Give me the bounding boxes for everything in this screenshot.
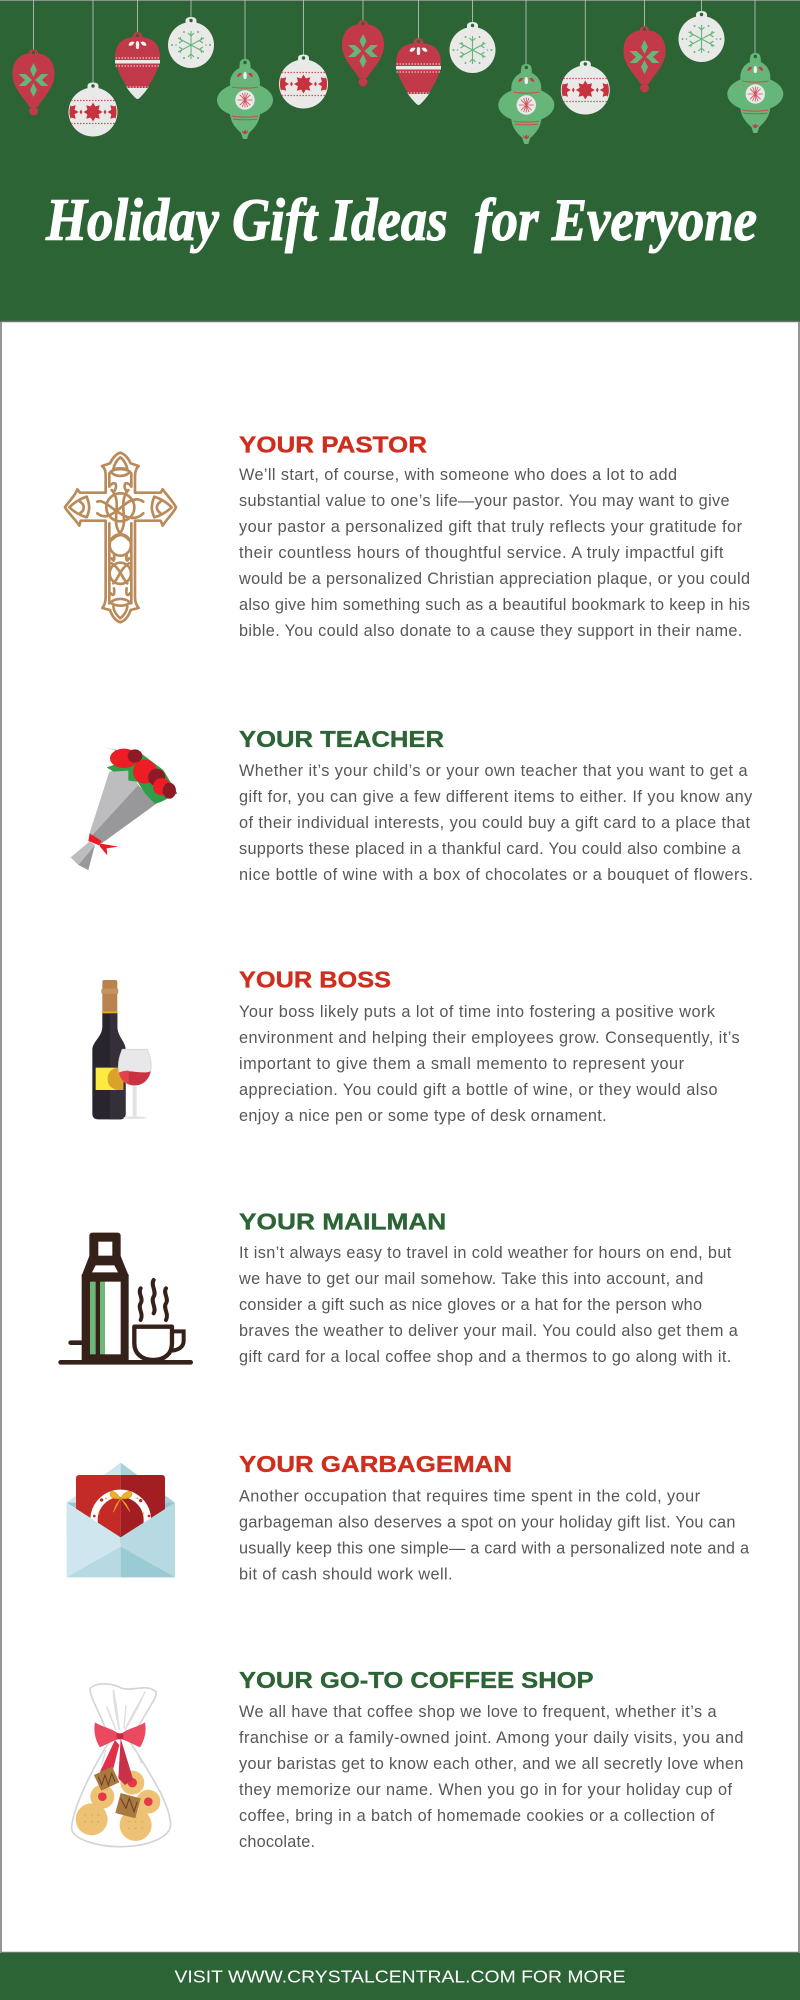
- hanging ornaments: [12, 0, 783, 144]
- panel: your go-to coffee shop: [72, 1667, 743, 1851]
- ornament: snowflake ball 1: [168, 0, 214, 68]
- text: coffee shop paragraph: franchise or a family-owned joint. Among your daily visits, you and: [239, 1729, 743, 1747]
- text: boss paragraph: appreciation. You could gift a bottle of wine, or they would also: [239, 1081, 718, 1099]
- ornament: green 1: [217, 0, 273, 139]
- text: boss paragraph: environment and helping their employees grow. Consequently, it’s: [239, 1029, 740, 1047]
- header band: [0, 0, 800, 322]
- panel: your mailman: [61, 1209, 739, 1366]
- text: mailman paragraph: It isn’t always easy to travel in cold weather for hours on end, but: [239, 1244, 732, 1262]
- text: coffee shop paragraph: they memorize our name. When you go in for your holiday cup of: [239, 1781, 732, 1799]
- icon: thermos and coffee cup: [61, 1233, 191, 1362]
- text: pastor paragraph: their countless hours of thoughtful service. A truly impactful gift: [239, 544, 724, 562]
- text: mailman paragraph: gift card for a local coffee shop and a thermos to go along with it.: [239, 1348, 731, 1366]
- heading: your pastor: YOUR PASTOR: [239, 432, 427, 458]
- ornament: white ball 2: [270, 0, 337, 108]
- text: teacher paragraph: [239, 762, 753, 884]
- text: mailman paragraph: we have to get our mail somehow. Take this into account, and: [238, 1270, 703, 1288]
- text: coffee shop paragraph: We all have that coffee shop we love to frequent, whether it’s a: [239, 1703, 717, 1721]
- text: garbageman paragraph: usually keep this one simple— a card with a personalized note and a: [239, 1540, 750, 1558]
- ornament: red drop 3: [624, 0, 666, 92]
- ornament: green 2: [498, 0, 554, 144]
- text: teacher paragraph: supports these placed in a thankful card. You could also combine a: [239, 840, 742, 858]
- text: teacher paragraph: nice bottle of wine with a box of chocolates or a bouquet of flowers.: [239, 866, 753, 884]
- footer text: VISIT WWW.CRYSTALCENTRAL.COM FOR MORE: [174, 1967, 626, 1987]
- text: coffee shop paragraph: [239, 1703, 743, 1851]
- panel: your boss: [92, 966, 740, 1125]
- text: pastor paragraph: your pastor a personalized gift that truly reflects your gratitude for: [239, 518, 743, 536]
- text: mailman paragraph: [238, 1244, 739, 1366]
- icon: bouquet of roses: [71, 747, 177, 870]
- icon: bag of cookies: [72, 1684, 171, 1847]
- ornament: red drop 1: [12, 0, 54, 116]
- text: coffee shop paragraph: chocolate.: [239, 1833, 315, 1851]
- heading: your mailman: YOUR MAILMAN: [239, 1209, 446, 1235]
- heading: your teacher: YOUR TEACHER: [239, 726, 444, 752]
- ornament: red drop 2: [342, 0, 384, 86]
- text: pastor paragraph: would be a personalized Christian appreciation plaque, or you could: [238, 570, 750, 588]
- text: pastor paragraph: [238, 466, 750, 640]
- heading: your garbageman: YOUR GARBAGEMAN: [239, 1451, 512, 1477]
- panel: your teacher: [71, 726, 753, 884]
- ornament: snowflake ball 3: [678, 0, 724, 62]
- text: pastor paragraph: We’ll start, of course, with someone who does a lot to add: [239, 466, 677, 484]
- text: garbageman paragraph: bit of cash should work well.: [239, 1566, 452, 1584]
- text: pastor paragraph: bible. You could also donate to a cause they support in their name.: [239, 622, 742, 640]
- icon: envelope with holiday card: [67, 1463, 175, 1577]
- ornament: green 3: [727, 0, 783, 133]
- text: pastor paragraph: substantial value to one’s life—your pastor. You may want to give: [239, 492, 730, 510]
- ornament: white ball 3: [552, 0, 619, 114]
- icon: ornate cross: [65, 453, 176, 622]
- text: garbageman paragraph: [239, 1488, 750, 1584]
- footer band: [0, 1953, 800, 2000]
- icon: wine bottle and glass: [92, 980, 151, 1119]
- text: boss paragraph: Your boss likely puts a lot of time into fostering a positive work: [239, 1003, 716, 1021]
- text: teacher paragraph: Whether it’s your child’s or your own teacher that you want to get a: [239, 762, 748, 780]
- heading: your go-to coffee shop: YOUR GO-TO COFFEE SHOP: [239, 1667, 594, 1693]
- text: mailman paragraph: braves the weather to deliver your mail. You could also get them a: [239, 1322, 739, 1340]
- text: mailman paragraph: consider a gift such as nice gloves or a hat for the person who: [239, 1296, 702, 1314]
- text: garbageman paragraph: garbageman also deserves a spot on your holiday gift list. You can: [239, 1514, 735, 1532]
- ornament: red striped 1: [115, 0, 160, 99]
- text: pastor paragraph: also give him something such as a beautiful bookmark to keep in his: [239, 596, 750, 614]
- text: boss paragraph: important to give them a small memento to represent your: [239, 1055, 685, 1073]
- text: boss paragraph: enjoy a nice pen or some type of desk ornament.: [239, 1107, 607, 1125]
- text: teacher paragraph: gift for, you can give a few different items to either. If you know any: [239, 788, 753, 806]
- text: garbageman paragraph: Another occupation that requires time spent in the cold, your: [239, 1488, 701, 1506]
- panel: your garbageman: [67, 1451, 750, 1584]
- ornament: snowflake ball 2: [450, 0, 496, 73]
- panel: your pastor: [65, 432, 750, 640]
- text: teacher paragraph: of their individual interests, you could buy a gift card to a place that: [239, 814, 750, 832]
- text: boss paragraph: [239, 1003, 740, 1125]
- text: coffee shop paragraph: your baristas get to know each other, and we all secretly love when: [239, 1755, 743, 1773]
- heading: your boss: YOUR BOSS: [239, 966, 391, 992]
- ornament: white ball 1: [60, 0, 126, 136]
- ornament: red striped 2: [396, 0, 441, 105]
- top edge line: [0, 0, 800, 1]
- text: coffee shop paragraph: coffee, bring in a batch of homemade cookies or a collection of: [239, 1807, 715, 1825]
